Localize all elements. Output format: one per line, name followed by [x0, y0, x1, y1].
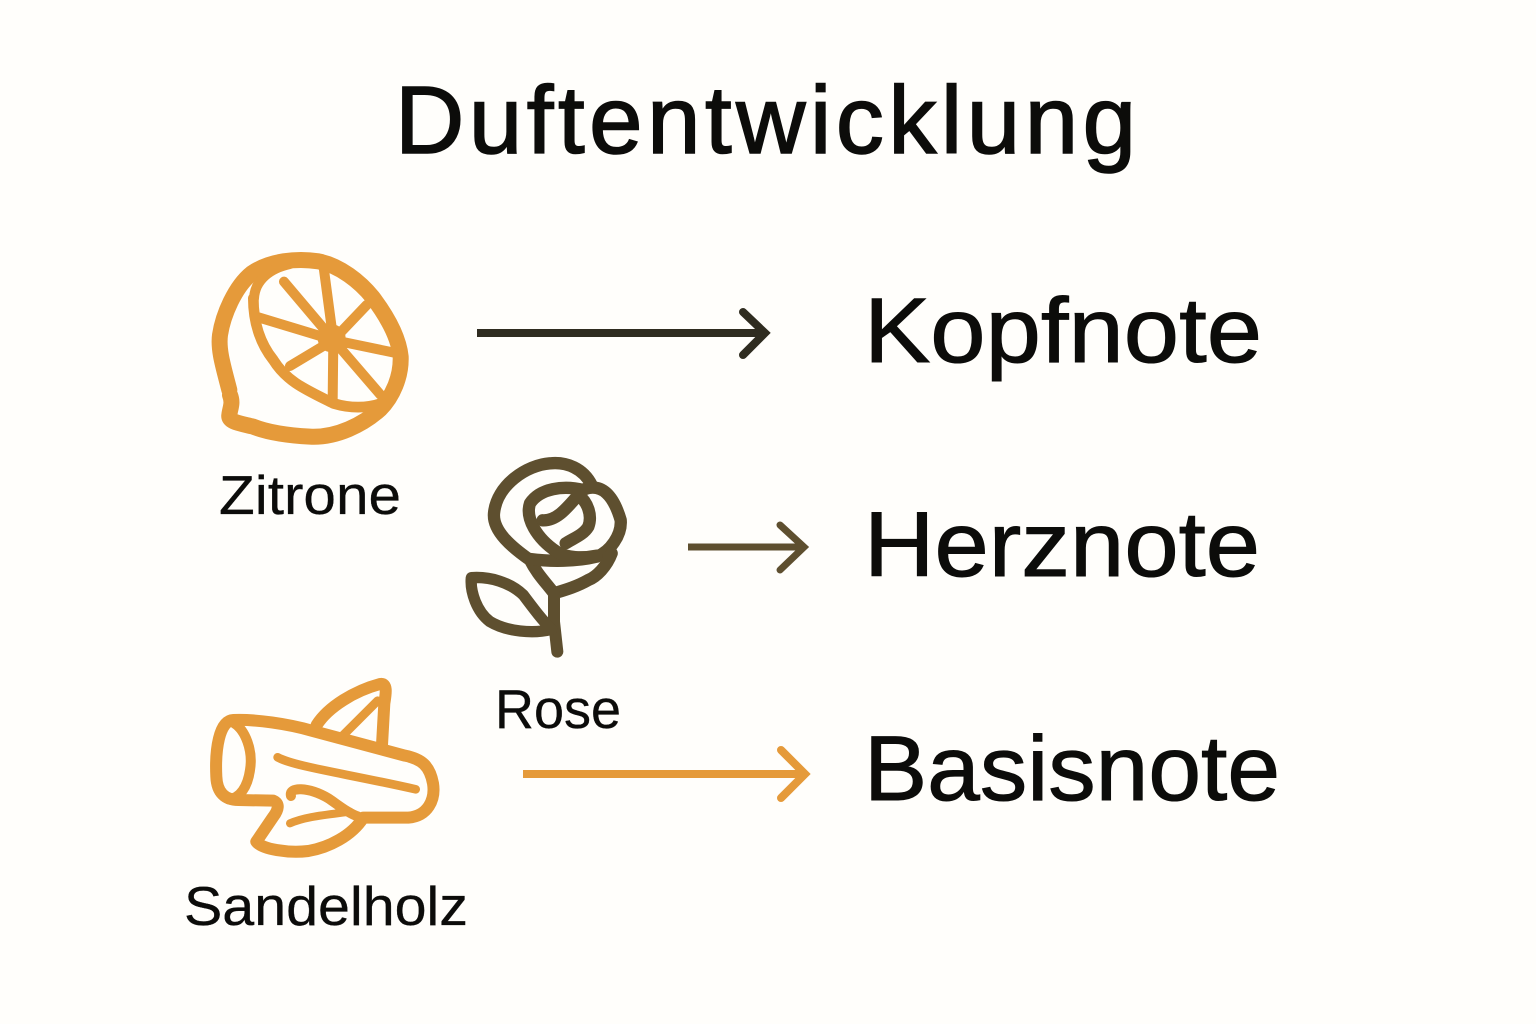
icon: rose	[471, 463, 621, 652]
label: Rose: Rose	[495, 678, 621, 740]
label: Basisnote: Basisnote	[864, 718, 1280, 820]
icon: lemon	[220, 260, 401, 437]
label: Zitrone: Zitrone	[219, 464, 401, 526]
arrow: heart note	[688, 525, 804, 570]
label: Herznote: Herznote	[864, 494, 1260, 596]
label: Kopfnote: Kopfnote	[864, 280, 1262, 382]
arrow: top note	[477, 312, 765, 355]
label: Sandelholz: Sandelholz	[184, 875, 468, 937]
title: Duftentwicklung	[395, 67, 1136, 174]
icon: sandalwood	[216, 684, 433, 852]
arrow: base note	[523, 750, 805, 798]
